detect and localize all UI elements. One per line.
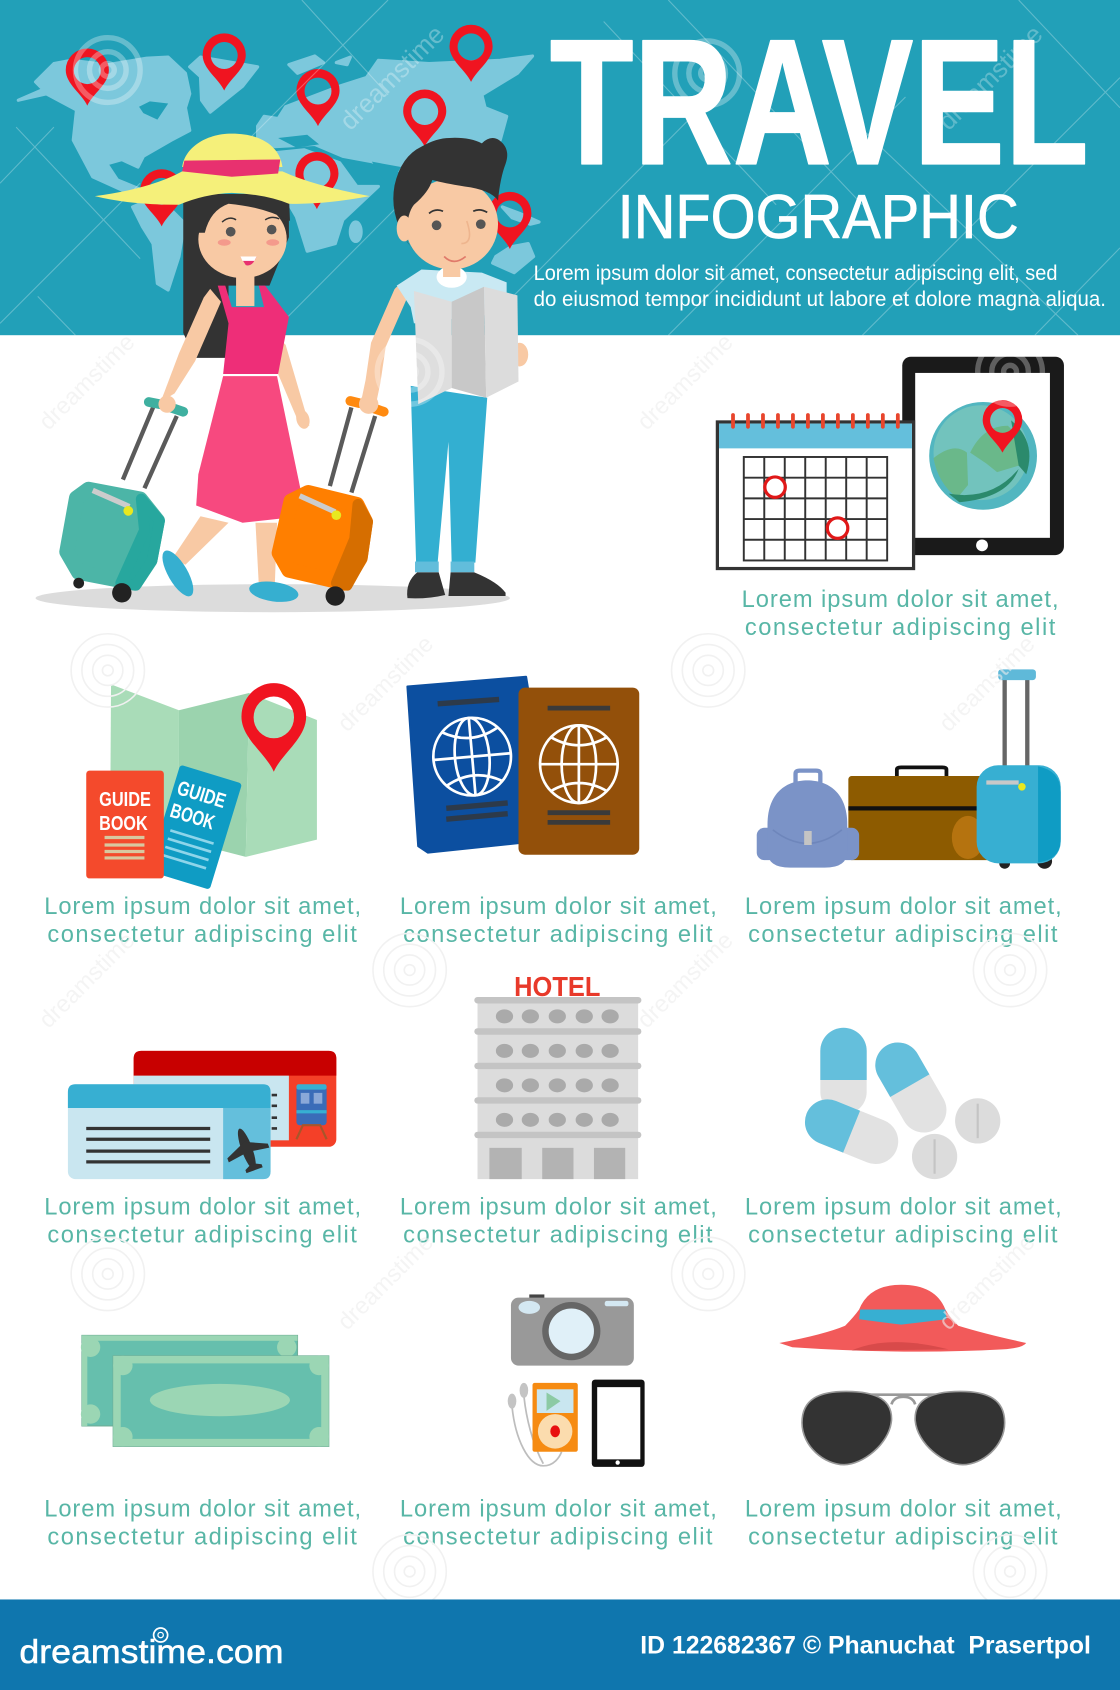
- watermark overlay: dreamstime: [34, 928, 140, 1034]
- illustration: woman with green suitcase: [67, 134, 370, 605]
- icon: sun hat and sunglasses: [779, 1285, 1026, 1465]
- icon: pills: [798, 1028, 1000, 1179]
- caption: calendar: [742, 587, 1059, 641]
- watermark overlay: dreamstime: [335, 20, 450, 136]
- watermark overlay: dreamstime: [34, 329, 140, 435]
- caption: banknotes: [44, 1496, 361, 1550]
- caption: luggage: [745, 894, 1062, 948]
- caption: passports: Lorem ipsum dolor sit amet,: [400, 894, 717, 920]
- watermark overlay: dreamstime: [333, 1229, 439, 1335]
- icon: passports: [407, 677, 639, 855]
- icon: banknotes: [81, 1335, 329, 1446]
- caption: map and guide books: Lorem ipsum dolor sit amet,: [44, 894, 361, 920]
- caption: banknotes: consectetur adipiscing elit: [47, 1524, 357, 1550]
- icon: map and guide books: [86, 683, 317, 890]
- caption: calendar: consectetur adipiscing elit: [745, 615, 1056, 641]
- icon: map and guide books: GUIDE: [174, 777, 229, 813]
- caption: pills: consectetur adipiscing elit: [748, 1223, 1058, 1249]
- intro text: do eiusmod tempor incididunt ut labore et dolore magna aliqua.: [534, 286, 1106, 311]
- watermark overlay: dreamstime: [633, 928, 739, 1034]
- caption: hat and sunglasses: consectetur adipiscing elit: [748, 1524, 1058, 1550]
- intro text: [534, 260, 1106, 311]
- caption: tickets: consectetur adipiscing elit: [47, 1223, 357, 1249]
- watermark overlay: dreamstime: [333, 631, 439, 737]
- icon: map and guide books: GUIDE: [99, 788, 151, 811]
- caption: tickets: [44, 1195, 361, 1249]
- caption: hat and sunglasses: Lorem ipsum dolor sit amet,: [745, 1496, 1062, 1522]
- caption: luggage: Lorem ipsum dolor sit amet,: [745, 894, 1062, 920]
- map pins: [66, 25, 531, 249]
- icon: map and guide books: BOOK: [167, 799, 218, 834]
- world map: [18, 56, 539, 290]
- watermark overlay: dreamstime: [934, 631, 1040, 737]
- icon: luggage: [757, 669, 1061, 869]
- icon: map and guide books: BOOK: [99, 812, 148, 835]
- caption: hotel: [400, 1195, 717, 1249]
- caption: camera and devices: consectetur adipiscing elit: [403, 1524, 713, 1550]
- caption: hotel: consectetur adipiscing elit: [403, 1223, 713, 1249]
- intro text: Lorem ipsum dolor sit amet, consectetur adipiscing elit, sed: [534, 260, 1057, 285]
- illustration: man with map and orange suitcase: [279, 138, 528, 606]
- caption: banknotes: Lorem ipsum dolor sit amet,: [44, 1496, 361, 1522]
- ground shadow: [36, 584, 510, 612]
- watermark overlay: dreamstime: [933, 20, 1048, 136]
- map seas: [139, 101, 401, 185]
- caption: camera and devices: [400, 1496, 717, 1550]
- icon: calendar and tablet: [717, 357, 1064, 569]
- icon: hotel: [474, 971, 641, 1179]
- caption: passports: consectetur adipiscing elit: [403, 922, 713, 948]
- caption: map and guide books: consectetur adipiscing elit: [47, 922, 357, 948]
- caption: hat and sunglasses: [745, 1496, 1062, 1550]
- caption: calendar: Lorem ipsum dolor sit amet,: [742, 587, 1059, 613]
- caption: hotel: Lorem ipsum dolor sit amet,: [400, 1195, 717, 1221]
- caption: tickets: Lorem ipsum dolor sit amet,: [44, 1195, 361, 1221]
- header watermark lines: [0, 0, 1120, 335]
- header band: [0, 0, 1120, 335]
- icon: tickets: [68, 1051, 336, 1179]
- watermark overlay: dreamstime: [934, 1229, 1040, 1335]
- caption: map and guide books: [44, 894, 361, 948]
- footer band: [0, 1599, 1120, 1690]
- footer logo: dreamstime.com: [19, 1634, 284, 1671]
- caption: camera and devices: Lorem ipsum dolor sit amet,: [400, 1496, 717, 1522]
- caption: luggage: consectetur adipiscing elit: [748, 922, 1058, 948]
- caption: pills: Lorem ipsum dolor sit amet,: [745, 1195, 1062, 1221]
- caption: passports: [400, 894, 717, 948]
- watermark overlay: dreamstime: [633, 329, 739, 435]
- caption: pills: [745, 1195, 1062, 1249]
- footer credit: ID 122682367 © Phanuchat Prasertpol: [640, 1632, 1091, 1659]
- icon: hotel: HOTEL: [514, 971, 600, 1002]
- subtitle: INFOGRAPHIC: [618, 182, 1019, 252]
- icon: camera, music player and phone: [508, 1294, 645, 1467]
